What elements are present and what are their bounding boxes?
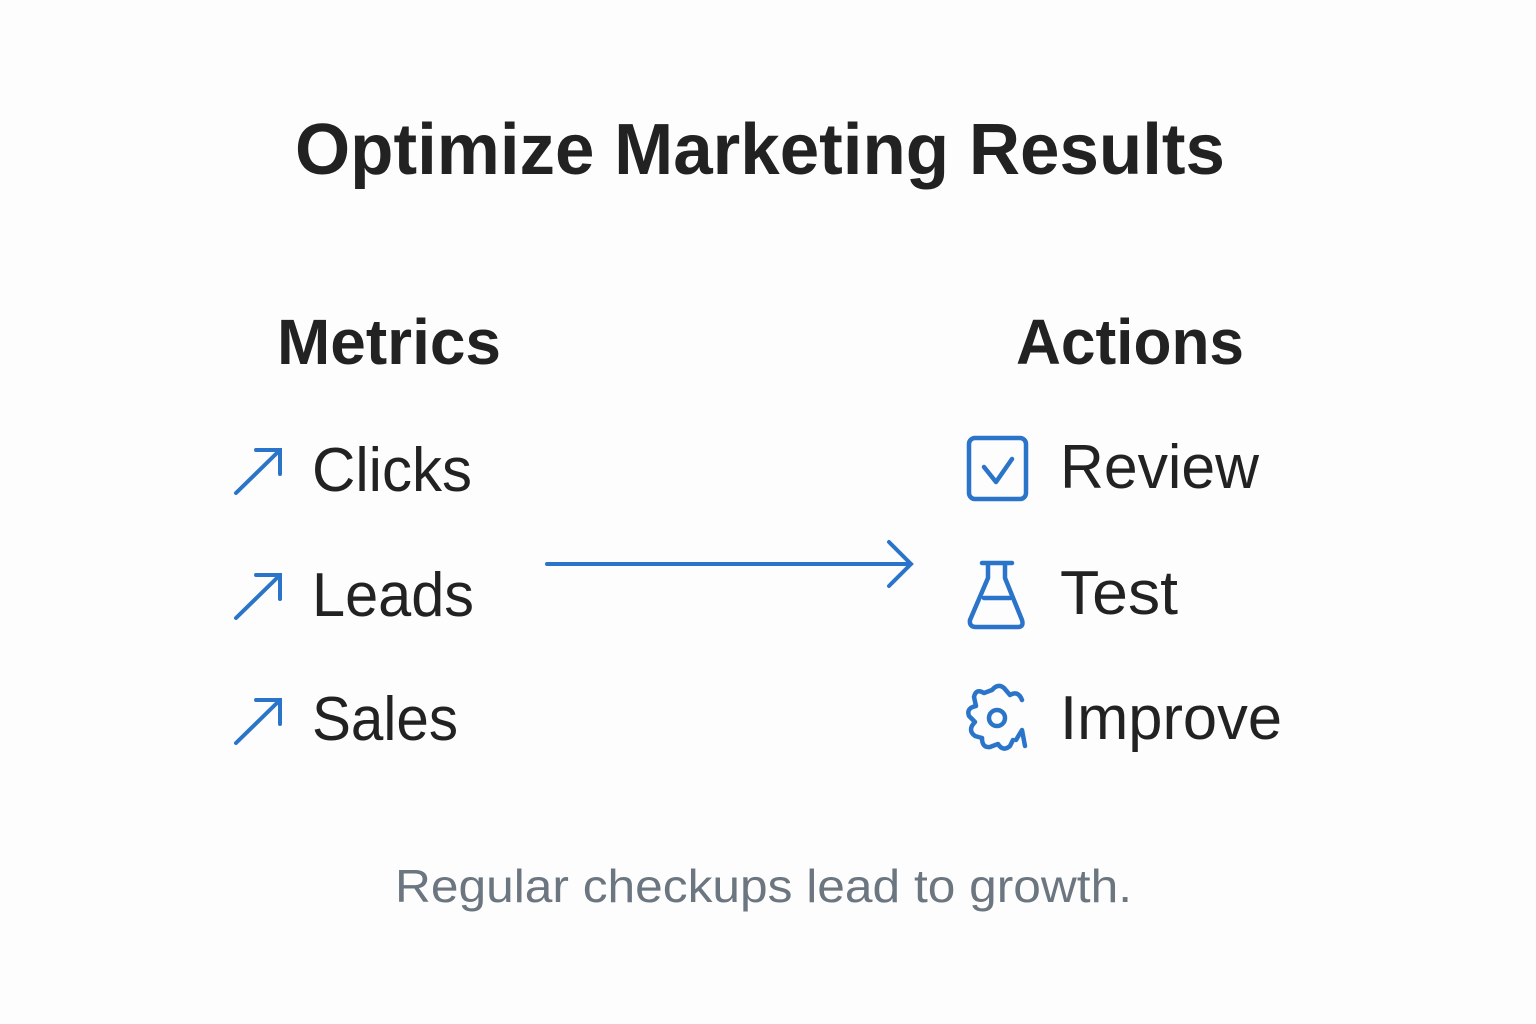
- icon: up arrow sales: [236, 700, 280, 743]
- actions list: [968, 433, 1282, 753]
- footer caption: Regular checkups lead to growth.: [395, 860, 1132, 912]
- title: Optimize Marketing Results: [295, 110, 1225, 190]
- text: review: Review: [1060, 433, 1259, 502]
- text: test: Test: [1060, 559, 1178, 628]
- icon: up arrow leads: [236, 575, 280, 618]
- icon: flask: [970, 563, 1022, 627]
- heading: actions: Actions: [1016, 306, 1244, 378]
- text: clicks: Clicks: [312, 436, 472, 505]
- icon: up arrow clicks: [236, 450, 280, 493]
- text: leads: Leads: [312, 561, 474, 630]
- icon: gear: [968, 686, 1025, 749]
- arrow: metrics to actions: [547, 542, 911, 586]
- metrics list: [236, 436, 474, 754]
- text: improve: Improve: [1060, 684, 1282, 753]
- heading: metrics: Metrics: [277, 306, 501, 378]
- icon: checkbox: [969, 438, 1026, 499]
- text: sales: Sales: [312, 685, 458, 754]
